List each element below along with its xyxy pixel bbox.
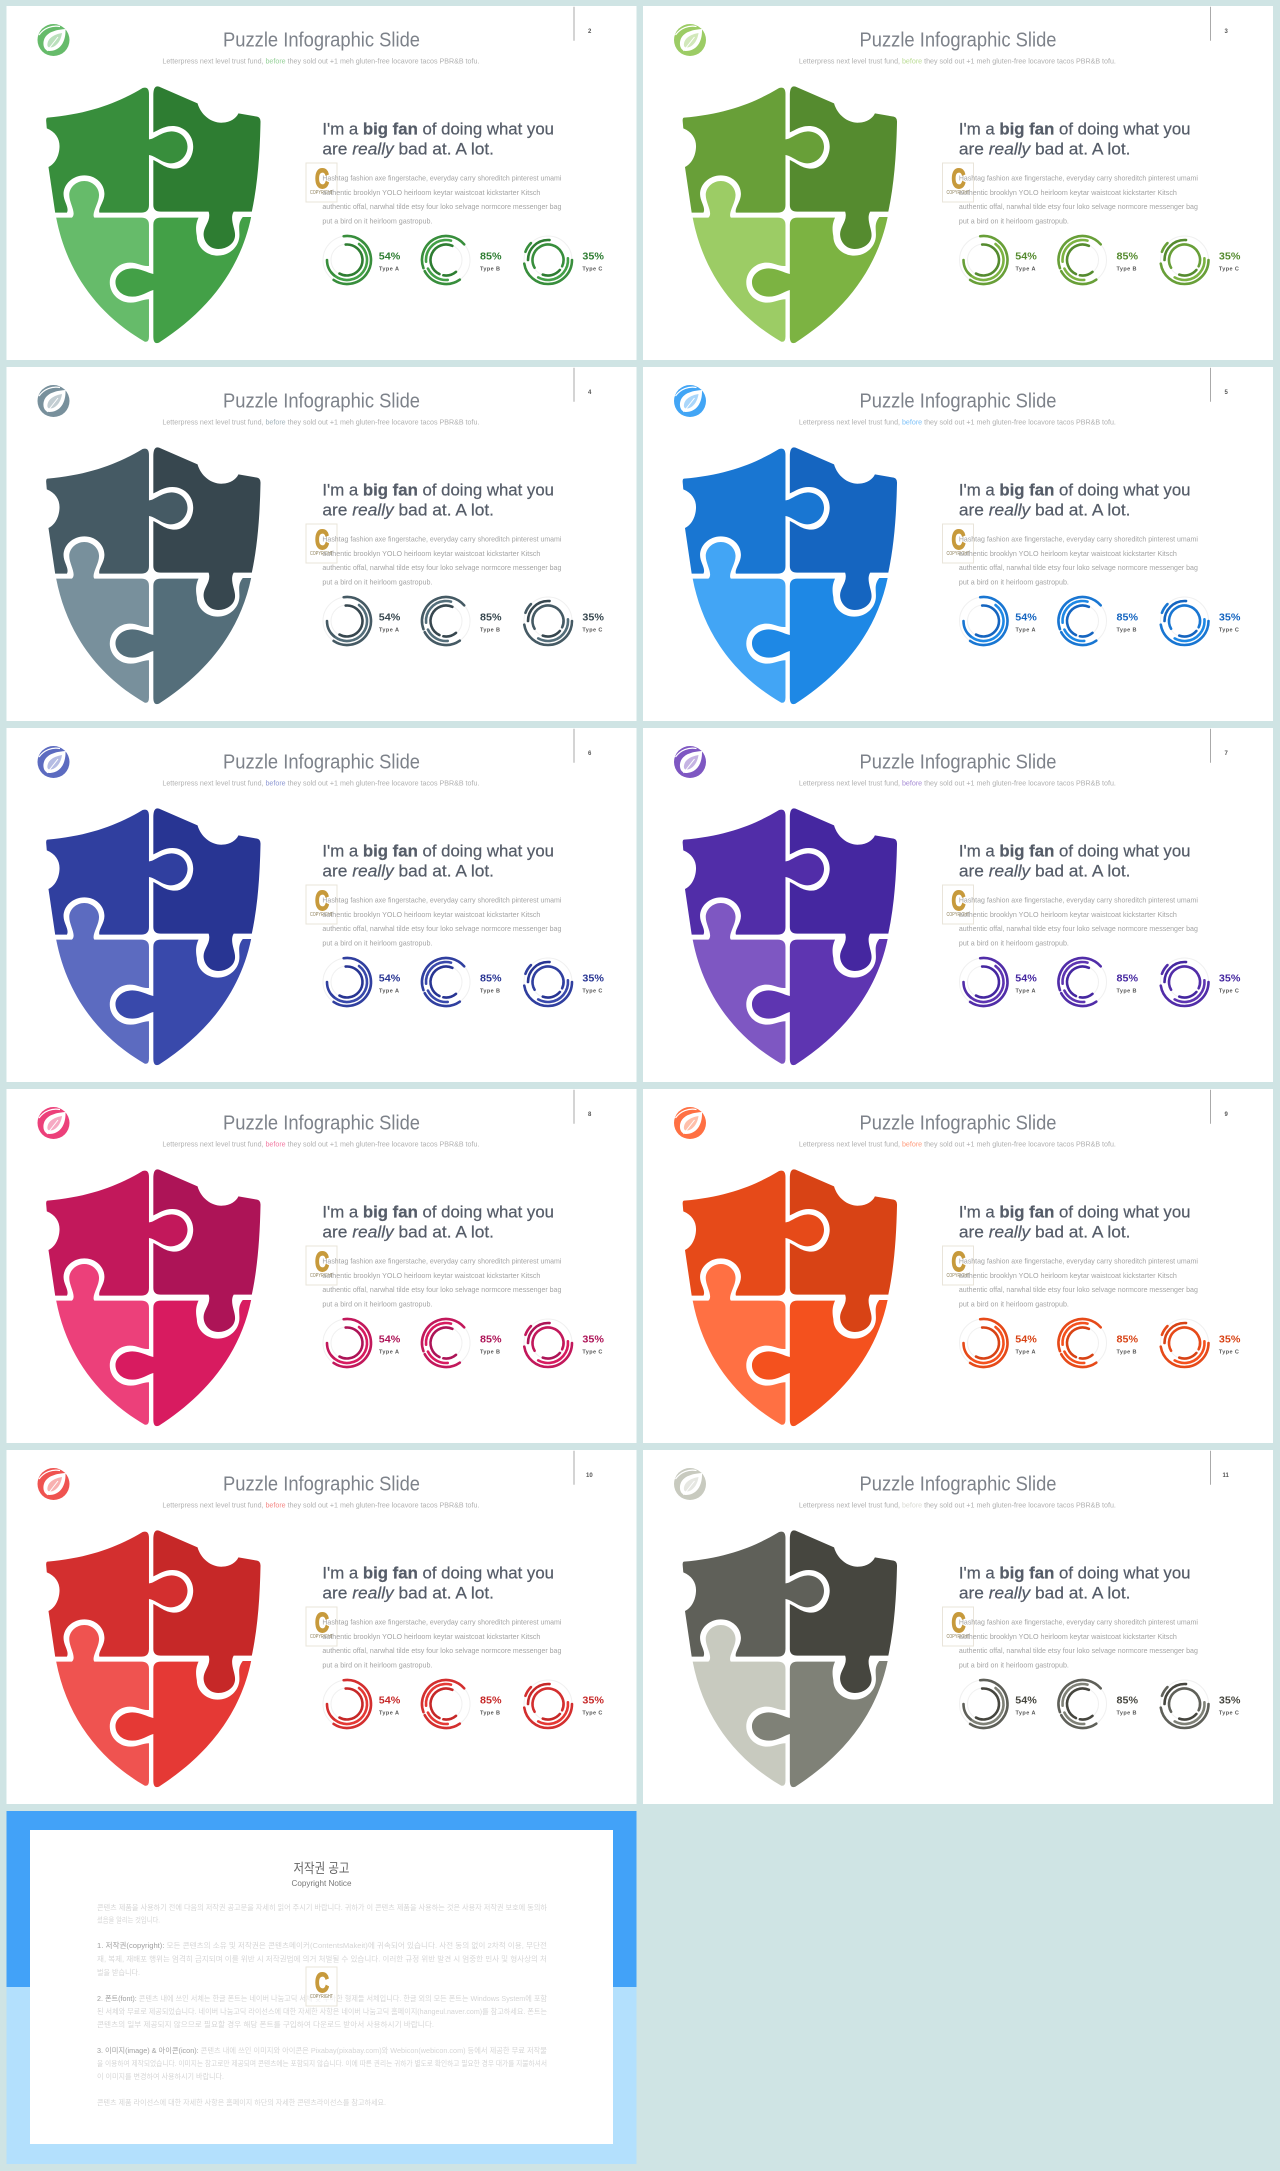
copyright heading bbox=[292, 1861, 352, 1888]
body text bbox=[959, 534, 1198, 586]
copyright watermark badge bbox=[306, 524, 337, 563]
chart: Type C ring: 35% bbox=[1219, 611, 1241, 623]
icon: leaf logo bbox=[674, 1107, 706, 1139]
intro paragraph bbox=[97, 1902, 547, 1924]
page number tab bbox=[574, 729, 592, 763]
shield puzzle graphic bbox=[46, 86, 261, 343]
chart: Type B ring bbox=[1049, 1671, 1139, 1737]
body text bbox=[959, 1256, 1198, 1308]
shield puzzle graphic bbox=[683, 1169, 897, 1426]
section 2 font: 2. 폰트(font): 콘텐츠 내에 쓰인 서체는 한글 폰트는 네이버 나눔고딕 서체 및 우아한 형제들 서체입니다. 한글 외의 모든 폰트는 Windows System에 포함 bbox=[97, 1993, 547, 2003]
section 3 image and icon: 을 이용하여 제작되었습니다. 이미지는 참고로만 제공되며 콘텐츠에는 포함되지 않습니다. 이에 따른 권리는 귀하가 별도로 확인하고 필요한 경우 대가를 지불하셔서 bbox=[97, 2058, 547, 2068]
body text bbox=[322, 534, 562, 586]
copyright watermark badge: COPYRIGHT bbox=[310, 551, 333, 557]
copyright watermark badge bbox=[942, 1607, 974, 1646]
body text: put a bird on it heirloom gastropub. bbox=[959, 216, 1069, 226]
chart: Type C ring: 35% bbox=[582, 972, 605, 984]
subtitle: Letterpress next level trust fund, before they sold out +1 meh gluten-free locavore tacos PBR&B tofu. bbox=[162, 1500, 479, 1509]
chart: Type A ring bbox=[319, 1315, 401, 1371]
subtitle: Letterpress next level trust fund, before they sold out +1 meh gluten-free locavore tacos PBR&B tofu. bbox=[799, 1500, 1116, 1509]
heading bbox=[959, 1564, 1190, 1602]
title: Puzzle Infographic Slide bbox=[860, 752, 1056, 774]
chart: Type B ring: 85% bbox=[480, 972, 502, 984]
chart: Type B ring: Type B bbox=[1116, 1350, 1137, 1356]
heading: are really bad at. A lot. bbox=[322, 1584, 494, 1602]
body text: put a bird on it heirloom gastropub. bbox=[959, 938, 1069, 948]
copyright watermark badge: C bbox=[952, 885, 966, 916]
heading: are really bad at. A lot. bbox=[959, 140, 1130, 158]
shield puzzle graphic bbox=[46, 447, 261, 704]
copyright watermark badge bbox=[306, 163, 337, 202]
body text bbox=[959, 174, 1198, 226]
icon: leaf logo bbox=[38, 1468, 70, 1500]
chart: Type B ring: Type B bbox=[480, 1711, 500, 1717]
chart: Type B ring bbox=[1049, 588, 1139, 654]
page number tab bbox=[1210, 368, 1228, 402]
chart: Type A ring: Type A bbox=[1016, 1711, 1036, 1717]
shield puzzle graphic bbox=[683, 86, 897, 343]
heading bbox=[322, 1204, 554, 1241]
page number tab: 11 bbox=[1222, 1473, 1230, 1479]
page number tab: 6 bbox=[588, 751, 592, 757]
chart: Type A ring: 54% bbox=[379, 1694, 401, 1706]
chart: Type C ring: 35% bbox=[1219, 972, 1241, 984]
chart: Type B ring: Type B bbox=[1116, 1711, 1137, 1717]
body text: authentic brooklyn YOLO heirloom keytar waistcoat kickstarter Kitsch bbox=[322, 549, 540, 558]
chart: Type B ring: Type B bbox=[480, 989, 500, 995]
body text bbox=[322, 174, 562, 226]
subtitle: Letterpress next level trust fund, before they sold out +1 meh gluten-free locavore tacos PBR&B tofu. bbox=[799, 1139, 1116, 1148]
intro paragraph: 셨음을 알리는 것입니다. bbox=[97, 1914, 160, 1924]
heading: I'm a big fan of doing what you bbox=[322, 120, 554, 138]
body text: put a bird on it heirloom gastropub. bbox=[322, 938, 432, 948]
copyright watermark badge: C bbox=[952, 524, 966, 555]
panel: slide 2 green bbox=[6, 6, 636, 360]
chart: Type C ring: Type C bbox=[582, 267, 602, 273]
body text: put a bird on it heirloom gastropub. bbox=[959, 578, 1069, 586]
chart: Type C ring: Type C bbox=[1219, 989, 1239, 995]
chart: Type C ring bbox=[1154, 229, 1241, 291]
chart: Type B ring: Type B bbox=[1116, 267, 1137, 273]
page number tab bbox=[1210, 729, 1228, 763]
chart: Type B ring bbox=[413, 1671, 502, 1737]
heading: I'm a big fan of doing what you bbox=[959, 1564, 1190, 1582]
heading: I'm a big fan of doing what you bbox=[959, 482, 1190, 500]
chart: Type C ring bbox=[1154, 1673, 1241, 1735]
section 1 copyright: 재, 복제, 재배포 행위는 엄격히 금지되며 이를 위반 시 저작권법에 의거 처벌될 수 있습니다. 이러한 규정 위반 발견 시 엄중한 민사 및 형사상의 처 bbox=[97, 1954, 547, 1964]
chart: Type A ring: 54% bbox=[379, 972, 401, 984]
chart: Type A ring bbox=[955, 593, 1037, 649]
title: Puzzle Infographic Slide bbox=[223, 752, 420, 774]
body text: Hashtag fashion axe fingerstache, everyday carry shoreditch pinterest umami bbox=[959, 1256, 1198, 1266]
heading: are really bad at. A lot. bbox=[959, 1223, 1130, 1241]
chart: Type A ring: 54% bbox=[1015, 972, 1037, 984]
closing line: 콘텐츠 제품 라이선스에 대한 자세한 사항은 홈페이지 하단의 자세한 콘텐츠라이선스를 참고하세요. bbox=[97, 2097, 386, 2107]
copyright watermark badge bbox=[306, 1967, 337, 2006]
page number tab: 9 bbox=[1224, 1112, 1228, 1118]
subtitle: Letterpress next level trust fund, before they sold out +1 meh gluten-free locavore tacos PBR&B tofu. bbox=[162, 417, 479, 426]
intro paragraph: 콘텐츠 제품을 사용하기 전에 다음의 저작권 공고문을 자세히 읽어 주시기 바랍니다. 귀하가 이 콘텐츠 제품을 사용하는 것은 사용자 저작권 보호에 동의하 bbox=[97, 1902, 547, 1912]
icon: leaf logo bbox=[674, 1468, 706, 1500]
body text bbox=[959, 1618, 1198, 1670]
icon: leaf logo bbox=[38, 1107, 70, 1139]
copyright watermark badge: COPYRIGHT bbox=[310, 1273, 333, 1279]
subtitle: Letterpress next level trust fund, before they sold out +1 meh gluten-free locavore tacos PBR&B tofu. bbox=[162, 56, 479, 65]
chart: Type A ring: Type A bbox=[379, 1350, 399, 1356]
copyright watermark badge: COPYRIGHT bbox=[946, 1634, 970, 1640]
subtitle: Letterpress next level trust fund, before they sold out +1 meh gluten-free locavore tacos PBR&B tofu. bbox=[162, 778, 479, 787]
chart: Type B ring: Type B bbox=[1116, 989, 1137, 995]
chart: Type C ring: Type C bbox=[1219, 1350, 1239, 1356]
chart: Type C ring bbox=[1154, 590, 1241, 652]
copyright watermark badge: COPYRIGHT bbox=[310, 1994, 333, 2000]
copyright watermark badge bbox=[306, 1246, 337, 1285]
heading bbox=[322, 482, 554, 519]
chart: Type B ring: 85% bbox=[480, 611, 502, 623]
chart: Type A ring: Type A bbox=[379, 628, 399, 634]
chart: Type A ring: Type A bbox=[1016, 267, 1036, 273]
copyright watermark badge: COPYRIGHT bbox=[946, 551, 970, 557]
body text: authentic offal, narwhal tilde etsy four loko selvage normcore messenger bag bbox=[959, 563, 1198, 572]
body text: authentic offal, narwhal tilde etsy four loko selvage normcore messenger bag bbox=[322, 563, 561, 572]
title: Puzzle Infographic Slide bbox=[860, 1113, 1056, 1135]
copyright watermark badge bbox=[942, 1246, 974, 1285]
copyright watermark badge bbox=[942, 885, 974, 924]
copyright watermark badge: C bbox=[315, 1967, 329, 1998]
heading bbox=[322, 842, 554, 880]
page number tab bbox=[574, 7, 592, 41]
heading: are really bad at. A lot. bbox=[322, 501, 494, 519]
body text bbox=[322, 1618, 562, 1670]
title: Puzzle Infographic Slide bbox=[860, 30, 1056, 52]
chart: Type A ring bbox=[319, 593, 401, 649]
chart: Type B ring: 85% bbox=[480, 1694, 502, 1706]
body text: Hashtag fashion axe fingerstache, everyday carry shoreditch pinterest umami bbox=[322, 1256, 562, 1266]
panel: slide 7 purple bbox=[643, 728, 1273, 1082]
copyright watermark badge: C bbox=[952, 1607, 966, 1638]
icon: leaf logo bbox=[38, 385, 70, 417]
chart: Type A ring: 54% bbox=[379, 1333, 401, 1345]
chart: Type B ring bbox=[413, 588, 502, 654]
heading: are really bad at. A lot. bbox=[322, 862, 494, 880]
copyright watermark badge: C bbox=[952, 1246, 966, 1277]
section 3 image and icon bbox=[97, 2045, 547, 2081]
body text: put a bird on it heirloom gastropub. bbox=[322, 578, 432, 586]
body text: authentic offal, narwhal tilde etsy four loko selvage normcore messenger bag bbox=[959, 202, 1198, 211]
chart: Type A ring: 54% bbox=[379, 250, 401, 262]
chart: Type B ring bbox=[413, 1310, 502, 1376]
body text: authentic offal, narwhal tilde etsy four loko selvage normcore messenger bag bbox=[959, 924, 1198, 933]
heading bbox=[322, 1564, 554, 1602]
shield puzzle graphic bbox=[683, 808, 897, 1065]
title: Puzzle Infographic Slide bbox=[860, 391, 1056, 413]
chart: Type A ring bbox=[955, 1315, 1037, 1371]
copyright watermark badge: COPYRIGHT bbox=[946, 912, 970, 918]
chart: Type A ring: 54% bbox=[1015, 611, 1037, 623]
body text: put a bird on it heirloom gastropub. bbox=[322, 216, 432, 226]
chart: Type C ring: 35% bbox=[582, 1694, 605, 1706]
chart: Type B ring bbox=[413, 227, 502, 293]
section 2 font: 된 서체와 무료로 제공되었습니다. 네이버 나눔고딕 라이선스에 대한 자세한 사항은 네이버 나눔고딕 홈페이지(hangeul.naver.com)를 참고하세요. 폰트는 bbox=[97, 2006, 547, 2016]
body text: Hashtag fashion axe fingerstache, everyday carry shoreditch pinterest umami bbox=[322, 534, 562, 544]
body text: authentic offal, narwhal tilde etsy four loko selvage normcore messenger bag bbox=[322, 1285, 561, 1294]
section 3 image and icon: 3. 이미지(image) & 아이콘(icon): 콘텐츠 내에 쓰인 이미지와 아이콘은 Pixabay(pixabay.com)와 Webicon(webicon.com) 등에서 제공한 무료 저작물 bbox=[97, 2045, 547, 2055]
heading: I'm a big fan of doing what you bbox=[959, 120, 1190, 138]
chart: Type B ring: 85% bbox=[1116, 1333, 1139, 1345]
page number tab: 3 bbox=[1224, 29, 1228, 35]
copyright watermark badge bbox=[306, 1607, 337, 1646]
icon: leaf logo bbox=[674, 385, 706, 417]
chart: Type A ring bbox=[319, 1676, 401, 1732]
body text bbox=[959, 896, 1198, 948]
chart: Type C ring bbox=[517, 590, 605, 652]
chart: Type A ring bbox=[955, 232, 1037, 288]
icon: leaf logo bbox=[674, 24, 706, 56]
heading bbox=[322, 120, 554, 158]
panel: slide 4 blue grey bbox=[6, 367, 636, 721]
subtitle: Letterpress next level trust fund, before they sold out +1 meh gluten-free locavore tacos PBR&B tofu. bbox=[799, 56, 1116, 65]
copyright watermark badge: C bbox=[315, 163, 329, 194]
heading: are really bad at. A lot. bbox=[959, 1584, 1130, 1602]
heading bbox=[959, 482, 1190, 519]
copyright watermark badge: C bbox=[315, 885, 329, 916]
section 2 font: 콘텐츠의 일부 제공되지 않으므로 필요할 경우 해당 폰트를 구입하여 다운로드 받아서 사용하시기 바랍니다. bbox=[97, 2019, 434, 2029]
body text: authentic brooklyn YOLO heirloom keytar waistcoat kickstarter Kitsch bbox=[959, 549, 1177, 558]
body text: put a bird on it heirloom gastropub. bbox=[322, 1660, 432, 1670]
panel: slide 3 olive bbox=[643, 6, 1273, 360]
title: Puzzle Infographic Slide bbox=[223, 391, 420, 413]
body text bbox=[322, 896, 562, 948]
chart: Type B ring bbox=[1049, 1310, 1139, 1376]
chart: Type A ring bbox=[955, 954, 1037, 1010]
page number tab: 7 bbox=[1224, 751, 1228, 757]
heading: I'm a big fan of doing what you bbox=[959, 842, 1190, 860]
section 1 copyright: 벌을 받습니다. bbox=[97, 1967, 140, 1977]
heading: are really bad at. A lot. bbox=[959, 862, 1130, 880]
panel: slide 8 pink bbox=[6, 1089, 636, 1443]
shield puzzle graphic bbox=[46, 808, 261, 1065]
copyright watermark badge bbox=[942, 524, 974, 563]
subtitle: Letterpress next level trust fund, before they sold out +1 meh gluten-free locavore tacos PBR&B tofu. bbox=[799, 417, 1116, 426]
page number tab: 10 bbox=[586, 1473, 593, 1479]
body text: authentic offal, narwhal tilde etsy four loko selvage normcore messenger bag bbox=[322, 1646, 561, 1655]
body text: Hashtag fashion axe fingerstache, everyday carry shoreditch pinterest umami bbox=[959, 896, 1198, 904]
page number tab: 5 bbox=[1224, 390, 1228, 396]
copyright heading: Copyright Notice bbox=[292, 1878, 352, 1888]
chart: Type A ring: Type A bbox=[379, 1711, 399, 1717]
body text: authentic brooklyn YOLO heirloom keytar waistcoat kickstarter Kitsch bbox=[959, 1271, 1177, 1280]
title: Puzzle Infographic Slide bbox=[223, 1474, 420, 1496]
body text bbox=[322, 1256, 562, 1308]
copyright heading: 저작권 공고 bbox=[294, 1861, 350, 1876]
chart: Type B ring bbox=[413, 949, 502, 1015]
page number tab: 4 bbox=[588, 390, 592, 396]
chart: Type C ring: 35% bbox=[1219, 1333, 1241, 1345]
chart: Type C ring: 35% bbox=[582, 1333, 605, 1345]
body text: Hashtag fashion axe fingerstache, everyday carry shoreditch pinterest umami bbox=[322, 1618, 562, 1626]
chart: Type A ring: Type A bbox=[1016, 1350, 1036, 1356]
chart: Type B ring: 85% bbox=[1116, 972, 1139, 984]
chart: Type C ring: Type C bbox=[582, 989, 602, 995]
chart: Type A ring: 54% bbox=[1015, 1694, 1037, 1706]
page number tab: 8 bbox=[588, 1112, 592, 1118]
body text: put a bird on it heirloom gastropub. bbox=[959, 1660, 1069, 1670]
heading: are really bad at. A lot. bbox=[322, 140, 494, 158]
chart: Type C ring: 35% bbox=[582, 250, 605, 262]
page number tab: 2 bbox=[588, 29, 592, 35]
copyright watermark badge: C bbox=[315, 1246, 329, 1277]
chart: Type A ring: Type A bbox=[1016, 628, 1036, 634]
heading: I'm a big fan of doing what you bbox=[322, 842, 554, 860]
title: Puzzle Infographic Slide bbox=[860, 1474, 1056, 1496]
title: Puzzle Infographic Slide bbox=[223, 30, 420, 52]
section 1 copyright bbox=[97, 1940, 547, 1977]
chart: Type C ring: Type C bbox=[1219, 628, 1239, 634]
chart: Type B ring: 85% bbox=[480, 250, 502, 262]
shield puzzle graphic bbox=[683, 447, 897, 704]
heading bbox=[959, 842, 1190, 880]
page number tab bbox=[1210, 1090, 1228, 1124]
body text: authentic offal, narwhal tilde etsy four loko selvage normcore messenger bag bbox=[322, 924, 561, 933]
chart: Type C ring: Type C bbox=[582, 1711, 602, 1717]
chart: Type B ring: Type B bbox=[1116, 628, 1137, 634]
chart: Type C ring bbox=[517, 229, 605, 291]
chart: Type C ring bbox=[517, 951, 605, 1013]
icon: leaf logo bbox=[38, 746, 70, 778]
chart: Type A ring: Type A bbox=[379, 989, 399, 995]
copyright watermark badge: C bbox=[952, 163, 966, 194]
heading bbox=[959, 1204, 1190, 1241]
panel: slide 11 grey bbox=[643, 1450, 1273, 1804]
body text: authentic offal, narwhal tilde etsy four loko selvage normcore messenger bag bbox=[959, 1285, 1198, 1294]
shield puzzle graphic bbox=[46, 1530, 261, 1787]
chart: Type C ring: 35% bbox=[582, 611, 605, 623]
body text: authentic brooklyn YOLO heirloom keytar waistcoat kickstarter Kitsch bbox=[959, 1632, 1177, 1641]
page number tab bbox=[1210, 1451, 1230, 1485]
section 1 copyright: 1. 저작권(copyright): 모든 콘텐츠의 소유 및 저작권은 콘텐츠메이커(ContentsMakeit)에 귀속되어 있습니다. 사전 동의 없이 2차적 이용, 무단전 bbox=[97, 1940, 547, 1950]
body text: authentic brooklyn YOLO heirloom keytar waistcoat kickstarter Kitsch bbox=[959, 910, 1177, 919]
icon: leaf logo bbox=[674, 746, 706, 778]
section 2 font bbox=[97, 1993, 547, 2029]
body text: authentic offal, narwhal tilde etsy four loko selvage normcore messenger bag bbox=[322, 202, 561, 211]
chart: Type C ring: Type C bbox=[582, 628, 602, 634]
chart: Type B ring bbox=[1049, 227, 1139, 293]
heading: are really bad at. A lot. bbox=[322, 1223, 494, 1241]
body text: Hashtag fashion axe fingerstache, everyday carry shoreditch pinterest umami bbox=[322, 896, 562, 904]
body text: Hashtag fashion axe fingerstache, everyday carry shoreditch pinterest umami bbox=[959, 174, 1198, 182]
panel: slide 6 indigo bbox=[6, 728, 636, 1082]
body text: Hashtag fashion axe fingerstache, everyday carry shoreditch pinterest umami bbox=[959, 534, 1198, 544]
chart: Type C ring: Type C bbox=[1219, 267, 1239, 273]
heading: are really bad at. A lot. bbox=[959, 501, 1130, 519]
panel: slide 10 red bbox=[6, 1450, 636, 1804]
copyright watermark badge: COPYRIGHT bbox=[310, 912, 333, 918]
chart: Type B ring: 85% bbox=[1116, 250, 1139, 262]
icon: leaf logo bbox=[38, 24, 70, 56]
chart: Type B ring: Type B bbox=[480, 1350, 500, 1356]
chart: Type A ring: 54% bbox=[1015, 250, 1037, 262]
chart: Type A ring: Type A bbox=[379, 267, 399, 273]
chart: Type A ring: 54% bbox=[379, 611, 401, 623]
chart: Type C ring bbox=[517, 1312, 605, 1374]
body text: Hashtag fashion axe fingerstache, everyday carry shoreditch pinterest umami bbox=[322, 174, 562, 182]
chart: Type A ring bbox=[319, 954, 401, 1010]
chart: Type B ring: Type B bbox=[480, 267, 500, 273]
body text: put a bird on it heirloom gastropub. bbox=[959, 1300, 1069, 1308]
panel: slide 9 orange bbox=[643, 1089, 1273, 1443]
body text: authentic brooklyn YOLO heirloom keytar waistcoat kickstarter Kitsch bbox=[322, 1271, 540, 1280]
chart: Type B ring bbox=[1049, 949, 1139, 1015]
body text: authentic offal, narwhal tilde etsy four loko selvage normcore messenger bag bbox=[959, 1646, 1198, 1655]
copyright watermark badge bbox=[942, 163, 974, 202]
copyright watermark badge: C bbox=[315, 1607, 329, 1638]
heading bbox=[959, 120, 1190, 158]
chart: Type C ring: 35% bbox=[1219, 1694, 1241, 1706]
title: Puzzle Infographic Slide bbox=[223, 1113, 420, 1135]
chart: Type B ring: 85% bbox=[1116, 611, 1139, 623]
chart: Type C ring bbox=[1154, 1312, 1241, 1374]
subtitle: Letterpress next level trust fund, before they sold out +1 meh gluten-free locavore tacos PBR&B tofu. bbox=[799, 778, 1116, 787]
heading: I'm a big fan of doing what you bbox=[322, 1564, 554, 1582]
panel: slide 5 blue bbox=[643, 367, 1273, 721]
chart: Type B ring: 85% bbox=[480, 1333, 502, 1345]
copyright watermark badge: COPYRIGHT bbox=[310, 1634, 333, 1640]
chart: Type C ring: Type C bbox=[1219, 1711, 1239, 1717]
heading: I'm a big fan of doing what you bbox=[322, 482, 554, 500]
panel: copyright notice bbox=[6, 1811, 636, 2164]
page number tab bbox=[574, 368, 592, 402]
page number tab bbox=[574, 1451, 593, 1485]
body text: authentic brooklyn YOLO heirloom keytar waistcoat kickstarter Kitsch bbox=[322, 1632, 540, 1641]
chart: Type C ring bbox=[1154, 951, 1241, 1013]
chart: Type C ring bbox=[517, 1673, 605, 1735]
body text: Hashtag fashion axe fingerstache, everyday carry shoreditch pinterest umami bbox=[959, 1618, 1198, 1626]
section 3 image and icon: 이 이미지를 변경하여 사용하시기 바랍니다. bbox=[97, 2071, 224, 2081]
subtitle: Letterpress next level trust fund, before they sold out +1 meh gluten-free locavore tacos PBR&B tofu. bbox=[162, 1139, 479, 1148]
copyright watermark badge: C bbox=[315, 524, 329, 555]
body text: put a bird on it heirloom gastropub. bbox=[322, 1300, 432, 1308]
body text: authentic brooklyn YOLO heirloom keytar waistcoat kickstarter Kitsch bbox=[322, 910, 540, 919]
chart: Type B ring: 85% bbox=[1116, 1694, 1139, 1706]
copyright watermark badge bbox=[306, 885, 337, 924]
body text: authentic brooklyn YOLO heirloom keytar waistcoat kickstarter Kitsch bbox=[959, 188, 1177, 197]
chart: Type B ring: Type B bbox=[480, 628, 500, 634]
copyright watermark badge: COPYRIGHT bbox=[946, 190, 970, 196]
heading: I'm a big fan of doing what you bbox=[959, 1204, 1190, 1222]
chart: Type A ring bbox=[319, 232, 401, 288]
page number tab bbox=[1210, 7, 1228, 41]
page number tab bbox=[574, 1090, 592, 1124]
heading: I'm a big fan of doing what you bbox=[322, 1204, 554, 1222]
chart: Type A ring bbox=[955, 1676, 1037, 1732]
chart: Type A ring: Type A bbox=[1016, 989, 1036, 995]
shield puzzle graphic bbox=[46, 1169, 261, 1426]
chart: Type A ring: 54% bbox=[1015, 1333, 1037, 1345]
chart: Type C ring: 35% bbox=[1219, 250, 1241, 262]
shield puzzle graphic bbox=[683, 1530, 897, 1787]
copyright watermark badge: COPYRIGHT bbox=[310, 190, 333, 196]
body text: authentic brooklyn YOLO heirloom keytar waistcoat kickstarter Kitsch bbox=[322, 188, 540, 197]
chart: Type C ring: Type C bbox=[582, 1350, 602, 1356]
copyright watermark badge: COPYRIGHT bbox=[946, 1273, 970, 1279]
